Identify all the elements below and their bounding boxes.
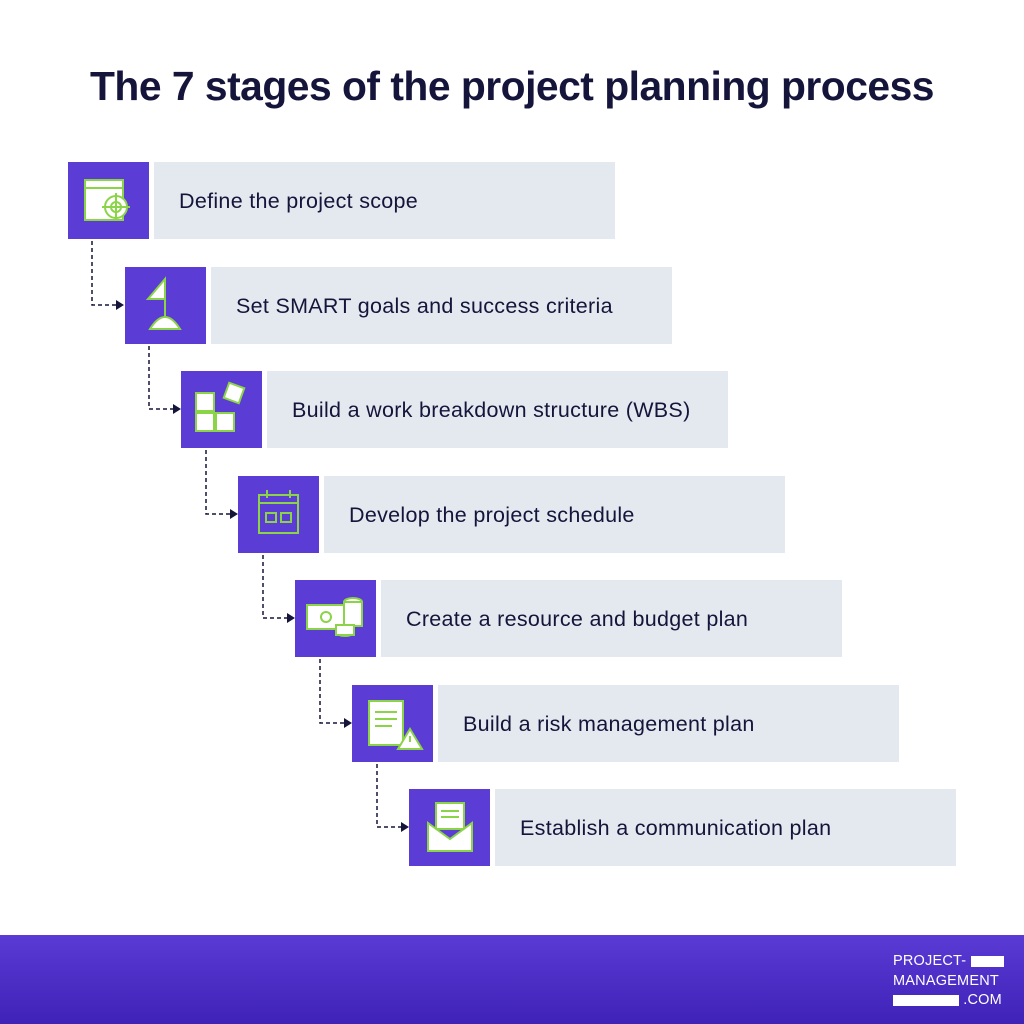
bar text	[381, 580, 842, 657]
icon: risk note	[352, 685, 433, 762]
icon: envelope	[409, 789, 490, 866]
step 4	[238, 476, 785, 553]
icon: calendar	[238, 476, 319, 553]
step 6	[352, 685, 899, 762]
bar text: Develop the project schedule	[349, 503, 635, 527]
icon: target window	[68, 162, 149, 239]
bar text: Build a work breakdown structure (WBS)	[292, 398, 691, 422]
bar text	[154, 162, 615, 239]
step 1	[68, 162, 615, 239]
bar text: Build a risk management plan	[463, 712, 755, 736]
bar text: Establish a communication plan	[520, 816, 831, 840]
step 2	[125, 267, 672, 344]
bar text: Set SMART goals and success criteria	[236, 294, 613, 318]
logo: .COM	[963, 992, 1002, 1008]
step 3	[181, 371, 728, 448]
bar text	[267, 371, 728, 448]
icon: puzzle	[181, 371, 262, 448]
bar text	[211, 267, 672, 344]
logo	[893, 953, 1004, 1008]
step 5	[295, 580, 842, 657]
title: The 7 stages of the project planning process	[90, 63, 934, 109]
logo: PROJECT-	[893, 953, 966, 969]
bar text	[495, 789, 956, 866]
logo: MANAGEMENT	[893, 972, 999, 988]
bar text: Create a resource and budget plan	[406, 607, 748, 631]
icon: money	[295, 580, 376, 657]
bar text	[438, 685, 899, 762]
icon: flag	[125, 267, 206, 344]
footer band	[0, 935, 1024, 1024]
step 7	[409, 789, 956, 866]
bar text	[324, 476, 785, 553]
bar text: Define the project scope	[179, 189, 418, 213]
